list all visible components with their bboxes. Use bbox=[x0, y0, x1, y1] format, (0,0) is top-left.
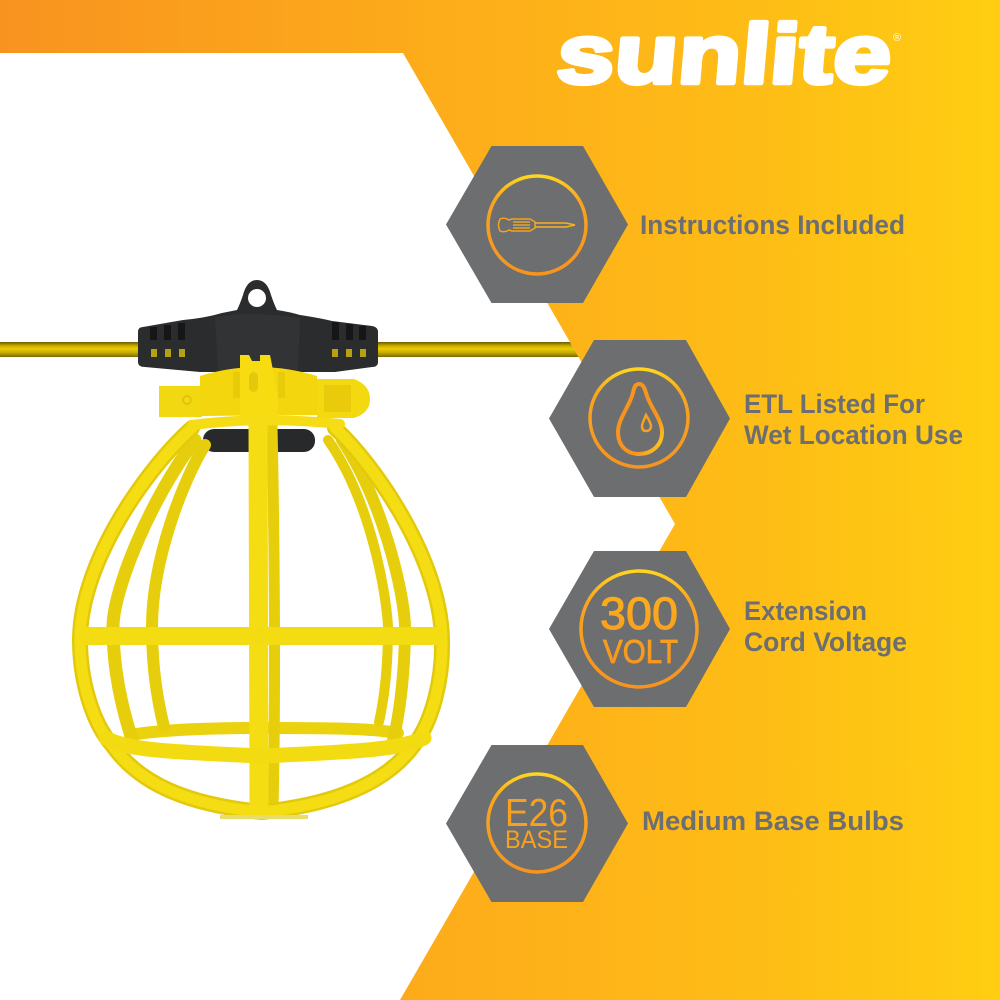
sunlite logo: ® bbox=[893, 32, 901, 44]
sunlite logo: sunlite bbox=[553, 7, 896, 101]
hexagon with water drop icon bbox=[549, 340, 730, 497]
label: Medium Base Bulbs bbox=[642, 806, 904, 836]
product: string light with yellow cage bbox=[0, 280, 582, 819]
feature: wet location bbox=[549, 340, 963, 497]
hexagon with 300 volt badge: 300 bbox=[600, 588, 678, 639]
hexagon with screwdriver icon bbox=[446, 146, 628, 303]
label: Cord Voltage bbox=[744, 627, 907, 657]
lower front band bbox=[106, 738, 424, 756]
back ring bbox=[130, 728, 398, 735]
hexagon with 300 volt badge bbox=[549, 551, 730, 707]
feature: 300 volt bbox=[549, 551, 907, 707]
label: Wet Location Use bbox=[744, 420, 963, 450]
cage ribs bbox=[80, 420, 443, 812]
yellow collar bbox=[159, 355, 370, 418]
hexagon with e26 base badge: BASE bbox=[505, 826, 568, 854]
hexagon with e26 base badge: E26 bbox=[505, 792, 568, 835]
top ring bbox=[192, 420, 340, 425]
feature: e26 base bbox=[446, 745, 904, 902]
hexagon with e26 base badge bbox=[446, 745, 628, 902]
feature: instructions included bbox=[446, 146, 905, 303]
label: Instructions Included bbox=[640, 210, 905, 240]
bottom tab bbox=[220, 815, 308, 819]
label: Extension bbox=[744, 596, 867, 626]
yellow cord bbox=[0, 342, 582, 357]
front centre rib bbox=[258, 424, 259, 812]
outer ribs bbox=[80, 428, 442, 812]
shadow ribs bbox=[113, 425, 405, 810]
upper horizontal band bbox=[81, 627, 443, 645]
label: ETL Listed For bbox=[744, 389, 925, 419]
black socket connector bbox=[138, 280, 378, 372]
label bbox=[744, 389, 963, 450]
black grommet bbox=[203, 429, 315, 452]
white panel bbox=[0, 53, 675, 1000]
hexagon with 300 volt badge: VOLT bbox=[603, 633, 678, 670]
label bbox=[744, 596, 907, 657]
